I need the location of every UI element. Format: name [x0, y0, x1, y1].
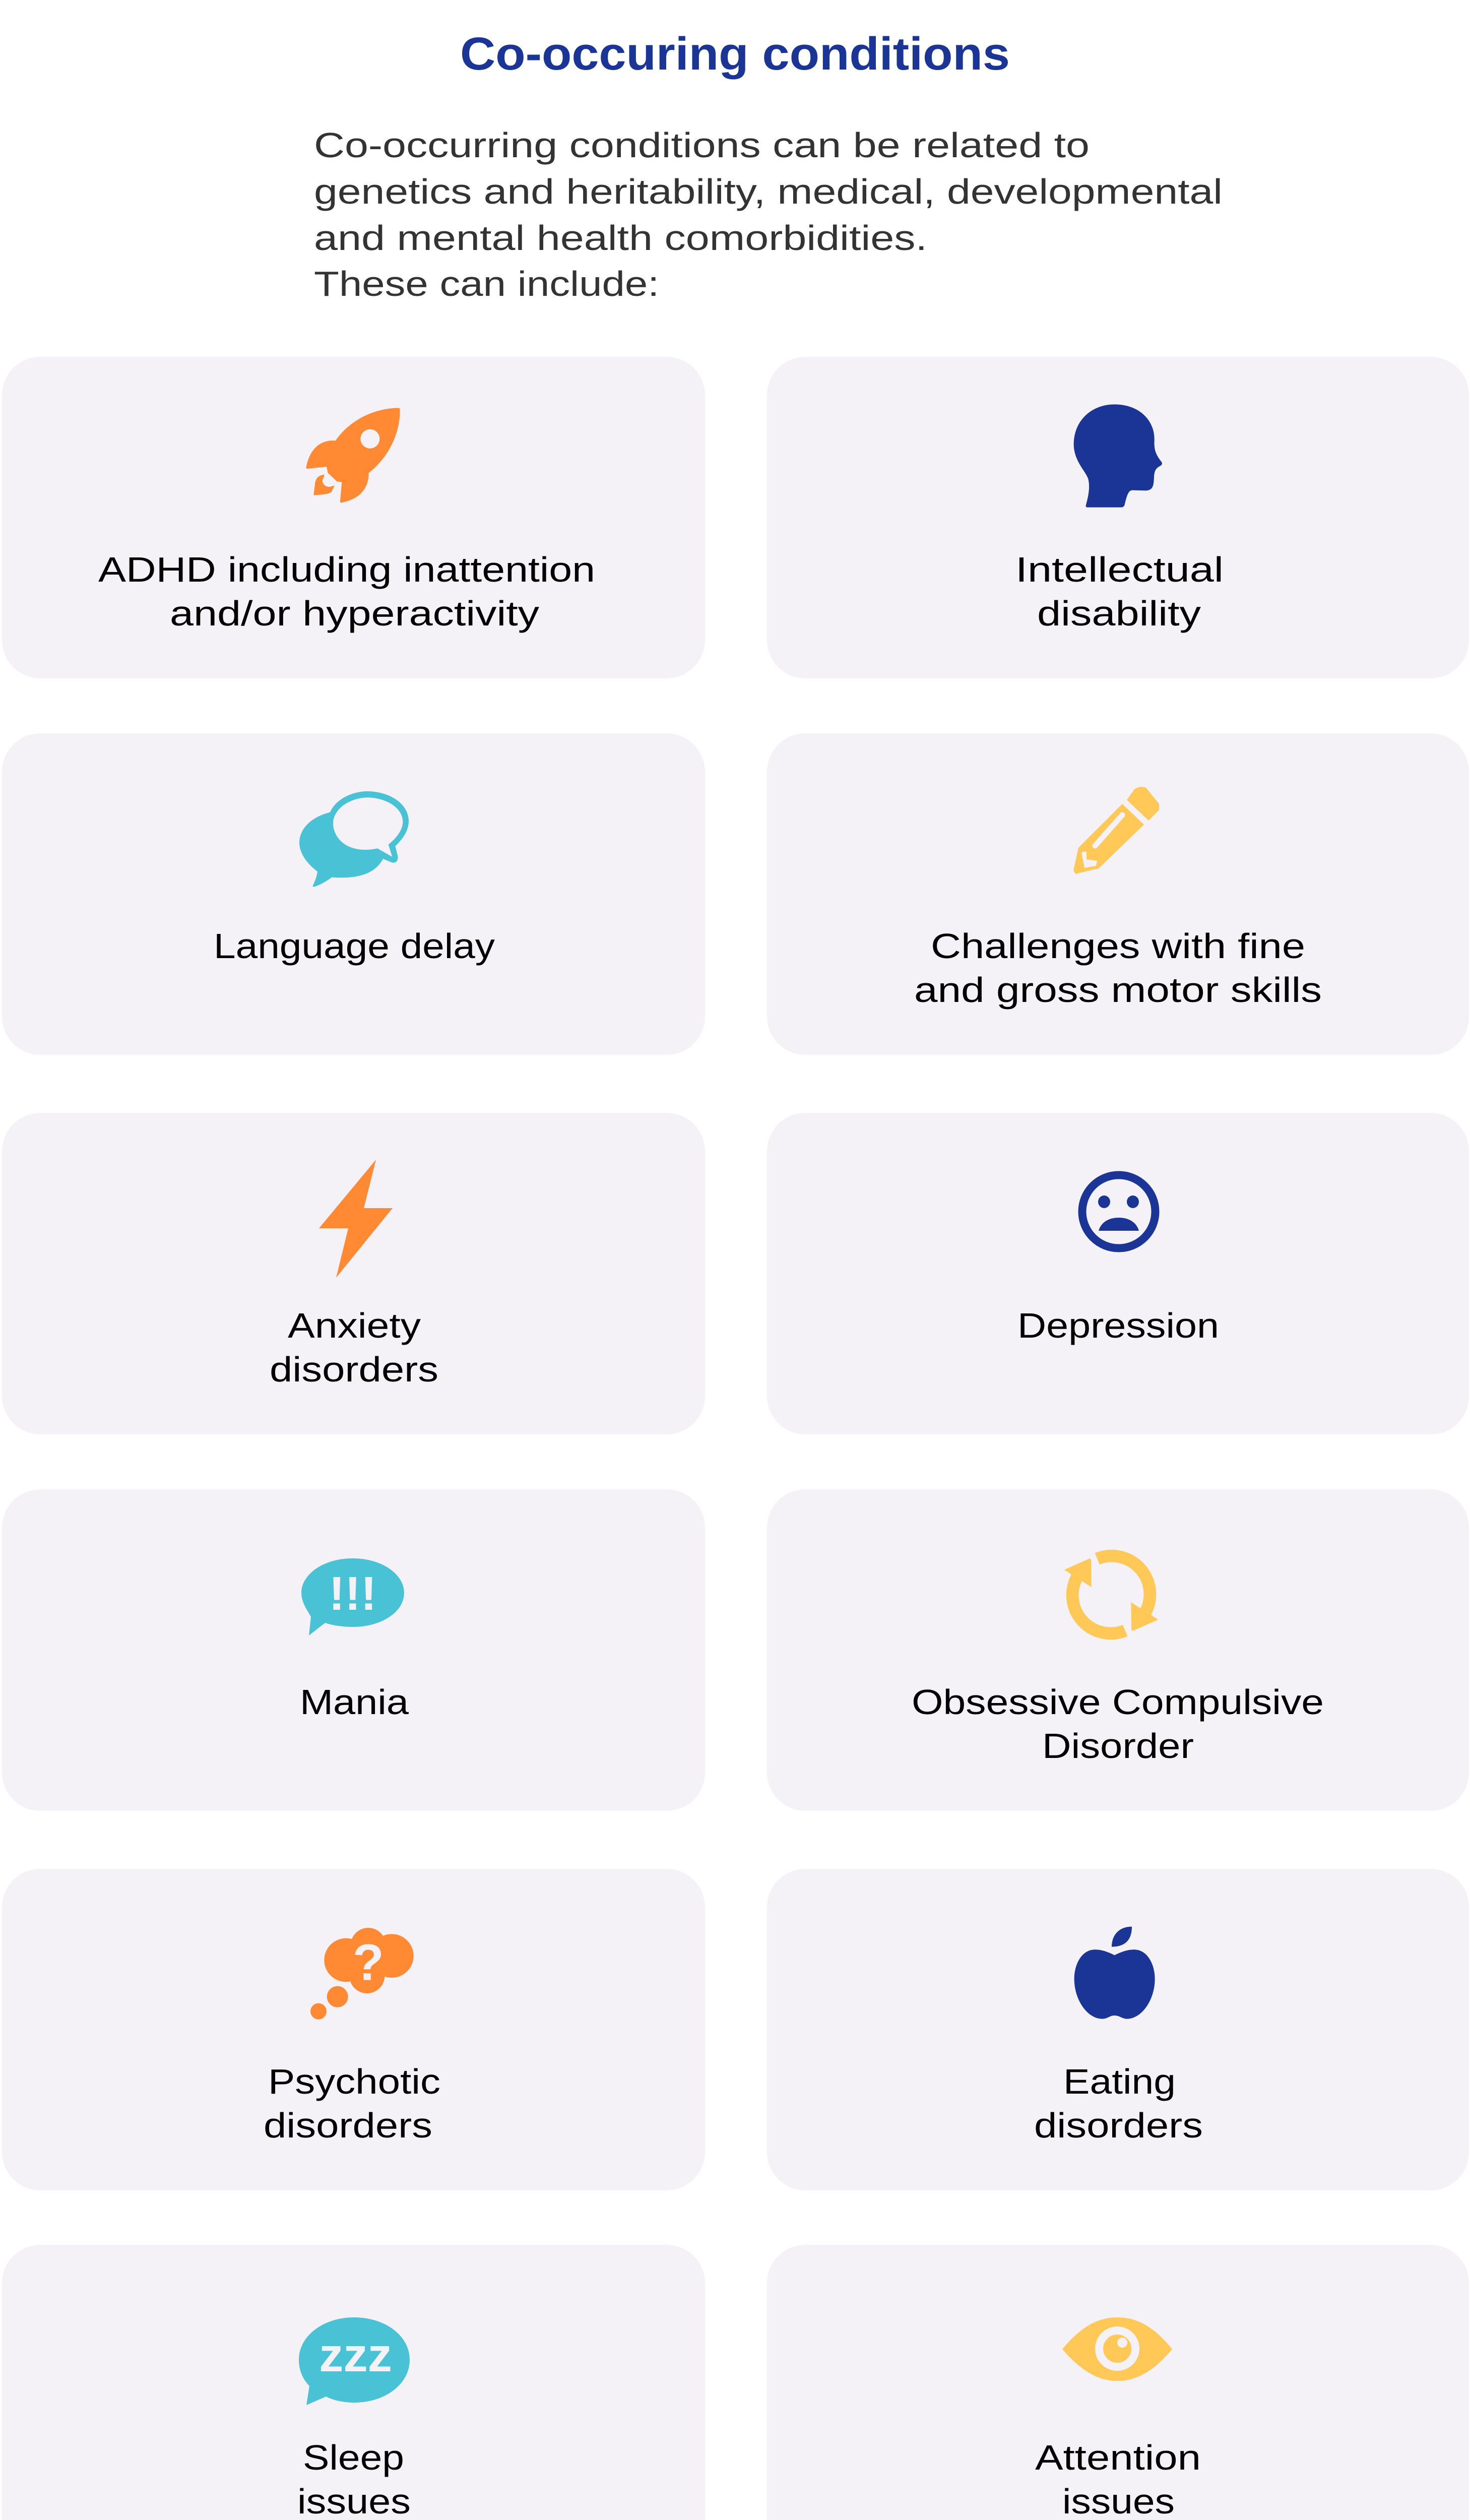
label: ADHD: and/or hyperactivity: [170, 594, 539, 633]
panel: attention issues: [767, 2245, 1469, 2520]
icon: circular arrows: [1064, 1556, 1158, 1633]
panel: eating disorders: [767, 1869, 1469, 2190]
label: sleep issues: [297, 2438, 411, 2520]
panel: psychotic disorders: [2, 1869, 705, 2190]
panel: ADHD: [2, 357, 705, 678]
title: Co-occuring conditions: [460, 28, 1010, 80]
icon: apple: [1074, 1927, 1155, 2019]
label: language delay: Language delay: [214, 926, 495, 966]
panel: motor skills: [767, 733, 1469, 1055]
label: motor skills: and gross motor skills: [914, 970, 1322, 1010]
label: eating disorders: disorders: [1034, 2106, 1203, 2145]
label: attention issues: Attention: [1035, 2438, 1201, 2477]
label: intellectual disability: [1015, 550, 1224, 633]
intro text block: and mental health comorbidities.: [314, 218, 927, 258]
panel: intellectual disability: [767, 357, 1469, 678]
label: anxiety disorders: [270, 1306, 438, 1389]
label: mania: Mania: [300, 1682, 409, 1722]
icon: sad face: [1082, 1175, 1155, 1248]
icon: head: [1074, 404, 1162, 508]
label: sleep issues: Sleep: [303, 2438, 404, 2477]
icon: zzz speech bubble: zzz: [319, 2328, 392, 2382]
intro text block: genetics and heritability, medical, developmental: [314, 172, 1223, 211]
label: attention issues: issues: [1062, 2482, 1175, 2520]
icon: speech bubbles: [299, 791, 409, 887]
label: intellectual disability: Intellectual: [1015, 550, 1224, 589]
panel: mania: [2, 1489, 705, 1811]
icon: lightning bolt: [319, 1160, 393, 1278]
label: OCD: [912, 1682, 1324, 1766]
label: eating disorders: Eating: [1063, 2062, 1176, 2101]
icon: pencil: [1073, 787, 1159, 874]
panel: depression: [767, 1113, 1469, 1434]
icon: zzz speech bubble: [299, 2317, 410, 2405]
icon: exclamation speech bubble: !!!: [329, 1567, 376, 1620]
icon: eye: [1062, 2317, 1172, 2381]
icon: rocket: [306, 408, 400, 502]
icon: thought cloud with question mark: [310, 1928, 414, 2020]
icon: exclamation speech bubble: [301, 1558, 404, 1635]
label: psychotic disorders: [264, 2062, 440, 2145]
label: eating disorders: [1034, 2062, 1203, 2145]
label: ADHD: ADHD including inattention: [98, 550, 595, 589]
label: OCD: Disorder: [1042, 1726, 1194, 1766]
label: ADHD: [98, 550, 595, 633]
panel: anxiety disorders: [2, 1113, 705, 1434]
panel: OCD: [767, 1489, 1469, 1811]
label: psychotic disorders: Psychotic: [268, 2062, 440, 2101]
intro text block: [314, 125, 1223, 303]
label: psychotic disorders: disorders: [264, 2106, 432, 2145]
label: anxiety disorders: disorders: [270, 1350, 438, 1389]
intro text block: These can include:: [314, 264, 659, 303]
label: depression: Depression: [1017, 1306, 1219, 1345]
panel: language delay: [2, 733, 705, 1055]
icon: thought cloud with question mark: ?: [353, 1933, 384, 1991]
panel: sleep issues: [2, 2245, 705, 2520]
label: motor skills: Challenges with fine: [931, 926, 1305, 966]
label: anxiety disorders: Anxiety: [288, 1306, 421, 1345]
intro text block: Co-occurring conditions can be related to: [314, 125, 1090, 165]
label: OCD: Obsessive Compulsive: [912, 1682, 1324, 1722]
label: motor skills: [914, 926, 1322, 1010]
label: intellectual disability: disability: [1037, 594, 1201, 633]
label: attention issues: [1035, 2438, 1201, 2520]
label: sleep issues: issues: [297, 2482, 411, 2520]
